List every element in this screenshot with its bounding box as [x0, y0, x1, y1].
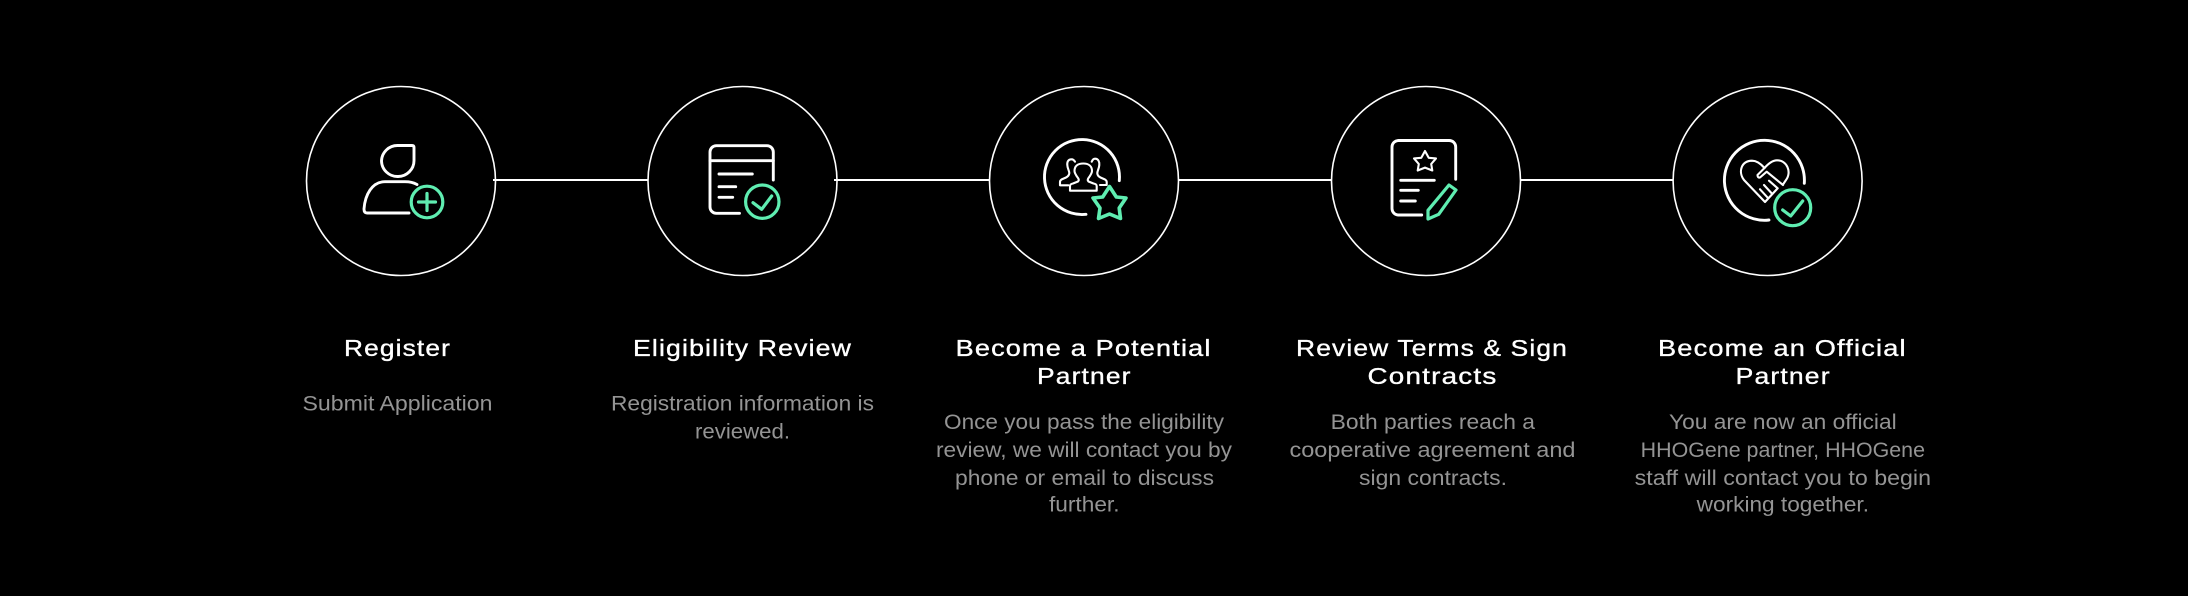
icon: group with star [1044, 140, 1126, 218]
step circle [1332, 86, 1520, 276]
icon: heart handshake with check [1724, 140, 1811, 226]
step 2: eligibility review [611, 86, 874, 443]
step 4: review terms and sign contracts [1290, 86, 1576, 490]
connector: step 3 to step 4 [1179, 179, 1332, 181]
description [1635, 411, 1931, 516]
step 3: become a potential partner [936, 86, 1233, 516]
heading: Become an Official [1658, 335, 1907, 361]
heading: Partner [1037, 363, 1132, 389]
description: review, we will contact you by [936, 439, 1233, 462]
heading: Register [344, 335, 451, 361]
step circle [648, 86, 837, 276]
description: You are now an official [1669, 411, 1897, 434]
heading [956, 335, 1212, 389]
description [1290, 411, 1576, 490]
connector: step 4 to step 5 [1520, 179, 1673, 181]
icon: document with star and pen [1392, 140, 1456, 219]
heading: Eligibility Review [633, 335, 852, 361]
description: Submit Application [302, 392, 492, 416]
description: further. [1049, 494, 1120, 516]
step 1: register [302, 86, 496, 416]
heading: Review Terms & Sign [1296, 335, 1568, 361]
description: Once you pass the eligibility [944, 411, 1225, 434]
description: phone or email to discuss [955, 467, 1214, 490]
heading [1658, 335, 1907, 389]
icon: add user [364, 146, 443, 218]
heading: Contracts [1368, 363, 1498, 389]
description: staff will contact you to begin [1635, 467, 1931, 490]
description: working together. [1696, 494, 1869, 516]
description [936, 411, 1233, 516]
description: Both parties reach a [1331, 411, 1535, 434]
description: HHOGene partner, HHOGene [1641, 439, 1925, 462]
step circle [306, 86, 496, 276]
connector: step 1 to step 2 [493, 179, 648, 181]
step 5: become an official partner [1635, 86, 1931, 516]
connector: step 2 to step 3 [834, 179, 990, 181]
description: sign contracts. [1359, 467, 1507, 490]
step circle [1673, 86, 1862, 276]
heading: Partner [1736, 363, 1831, 389]
step circle [990, 86, 1178, 276]
description: reviewed. [695, 420, 790, 443]
description: Registration information is [611, 392, 874, 416]
icon: form with check [710, 146, 779, 218]
heading: Become a Potential [956, 335, 1212, 361]
heading [1296, 335, 1568, 389]
description: cooperative agreement and [1290, 439, 1576, 462]
description [611, 392, 874, 443]
